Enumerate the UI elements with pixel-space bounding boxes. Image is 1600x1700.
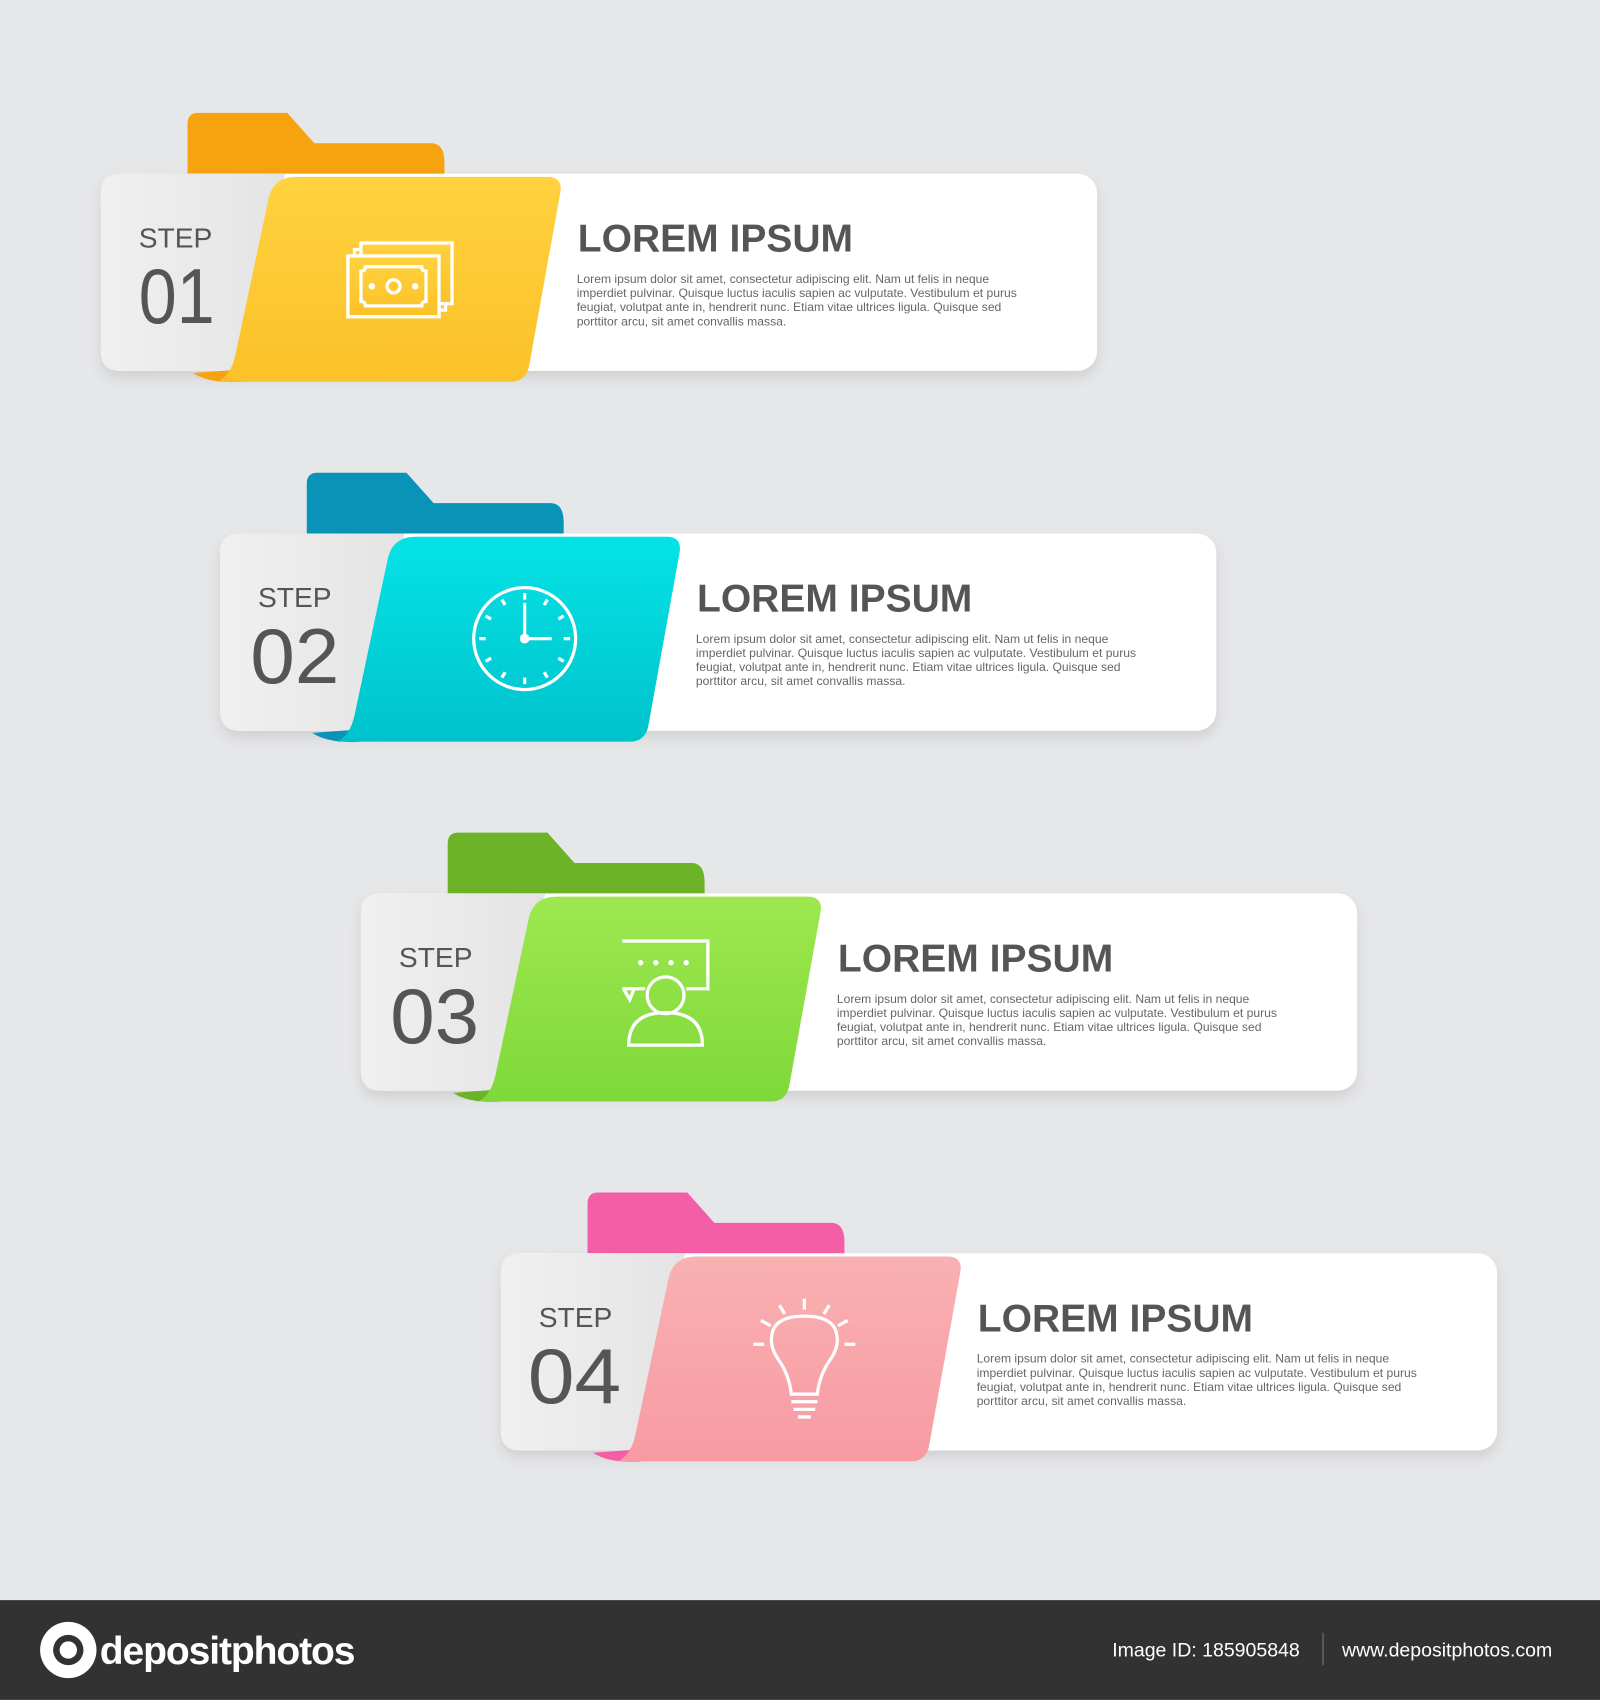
body text: imperdiet pulvinar. Quisque luctus iaculis sapien ac vulputate. Vestibulum et purus — [837, 1006, 1277, 1020]
title: LOREM IPSUM — [978, 1297, 1253, 1340]
body text: Lorem ipsum dolor sit amet, consectetur adipiscing elit. Nam ut felis in neque — [837, 992, 1250, 1006]
step number: 03 — [390, 972, 479, 1060]
body text: porttitor arcu, sit amet convallis massa. — [577, 314, 786, 328]
folder front — [618, 1257, 961, 1461]
image id: Image ID: 185905848 — [1112, 1640, 1300, 1662]
folder back tab — [307, 473, 564, 536]
icon: clock — [474, 588, 576, 690]
body text: feugiat, volutpat ante in, hendrerit nunc. Etiam vitae ultrices ligula. Quisque sed — [696, 660, 1121, 674]
icon: person with speech bubble — [622, 941, 708, 1045]
body text: feugiat, volutpat ante in, hendrerit nunc. Etiam vitae ultrices ligula. Quisque sed — [837, 1020, 1261, 1034]
card — [501, 1253, 1497, 1451]
body text — [577, 272, 1017, 328]
folder back tab — [588, 1193, 844, 1255]
body text: imperdiet pulvinar. Quisque luctus iaculis sapien ac vulputate. Vestibulum et purus — [977, 1366, 1417, 1380]
icon: light bulb — [753, 1299, 855, 1417]
body text: porttitor arcu, sit amet convallis massa. — [977, 1394, 1186, 1408]
body text — [696, 632, 1136, 688]
body text: feugiat, volutpat ante in, hendrerit nunc. Etiam vitae ultrices ligula. Quisque sed — [977, 1380, 1401, 1394]
icon: money — [348, 243, 452, 317]
title: LOREM IPSUM — [697, 578, 972, 621]
body text: porttitor arcu, sit amet convallis massa. — [696, 674, 906, 688]
step 1 — [101, 113, 1097, 382]
icon: camera logo — [40, 1622, 96, 1678]
curl — [193, 369, 253, 382]
body text: Lorem ipsum dolor sit amet, consectetur adipiscing elit. Nam ut felis in neque — [696, 632, 1109, 646]
body text: porttitor arcu, sit amet convallis massa. — [837, 1034, 1046, 1048]
card — [361, 893, 1357, 1091]
step label: STEP — [539, 1301, 612, 1333]
website: www.depositphotos.com — [1341, 1640, 1552, 1662]
body text — [837, 992, 1277, 1048]
body text — [977, 1352, 1417, 1408]
body text: imperdiet pulvinar. Quisque luctus iaculis sapien ac vulputate. Vestibulum et purus — [577, 286, 1017, 300]
curl — [453, 1088, 513, 1102]
footer bar — [0, 1600, 1600, 1700]
title: LOREM IPSUM — [578, 218, 853, 261]
logo text: depositphotos — [100, 1630, 355, 1673]
curl — [593, 1448, 653, 1462]
folder back tab — [188, 113, 444, 176]
step 3 — [361, 833, 1357, 1102]
folder front — [218, 177, 561, 382]
card — [101, 174, 1097, 371]
curl — [312, 729, 372, 742]
step label: STEP — [258, 581, 332, 613]
body text: Lorem ipsum dolor sit amet, consectetur adipiscing elit. Nam ut felis in neque — [577, 272, 989, 286]
title: LOREM IPSUM — [838, 937, 1113, 980]
folder front — [478, 897, 821, 1101]
folder back tab — [448, 833, 705, 896]
step label: STEP — [399, 941, 473, 973]
step 2 — [220, 473, 1216, 742]
card — [220, 533, 1216, 731]
step number: 04 — [528, 1332, 621, 1420]
step number: 02 — [250, 612, 339, 700]
step label: STEP — [139, 221, 212, 253]
body text: imperdiet pulvinar. Quisque luctus iaculis sapien ac vulputate. Vestibulum et purus — [696, 646, 1136, 660]
step number: 01 — [139, 252, 215, 340]
body text: Lorem ipsum dolor sit amet, consectetur adipiscing elit. Nam ut felis in neque — [977, 1352, 1389, 1366]
body text: feugiat, volutpat ante in, hendrerit nunc. Etiam vitae ultrices ligula. Quisque sed — [577, 300, 1001, 314]
folder front — [337, 537, 680, 742]
step 4 — [501, 1193, 1497, 1462]
